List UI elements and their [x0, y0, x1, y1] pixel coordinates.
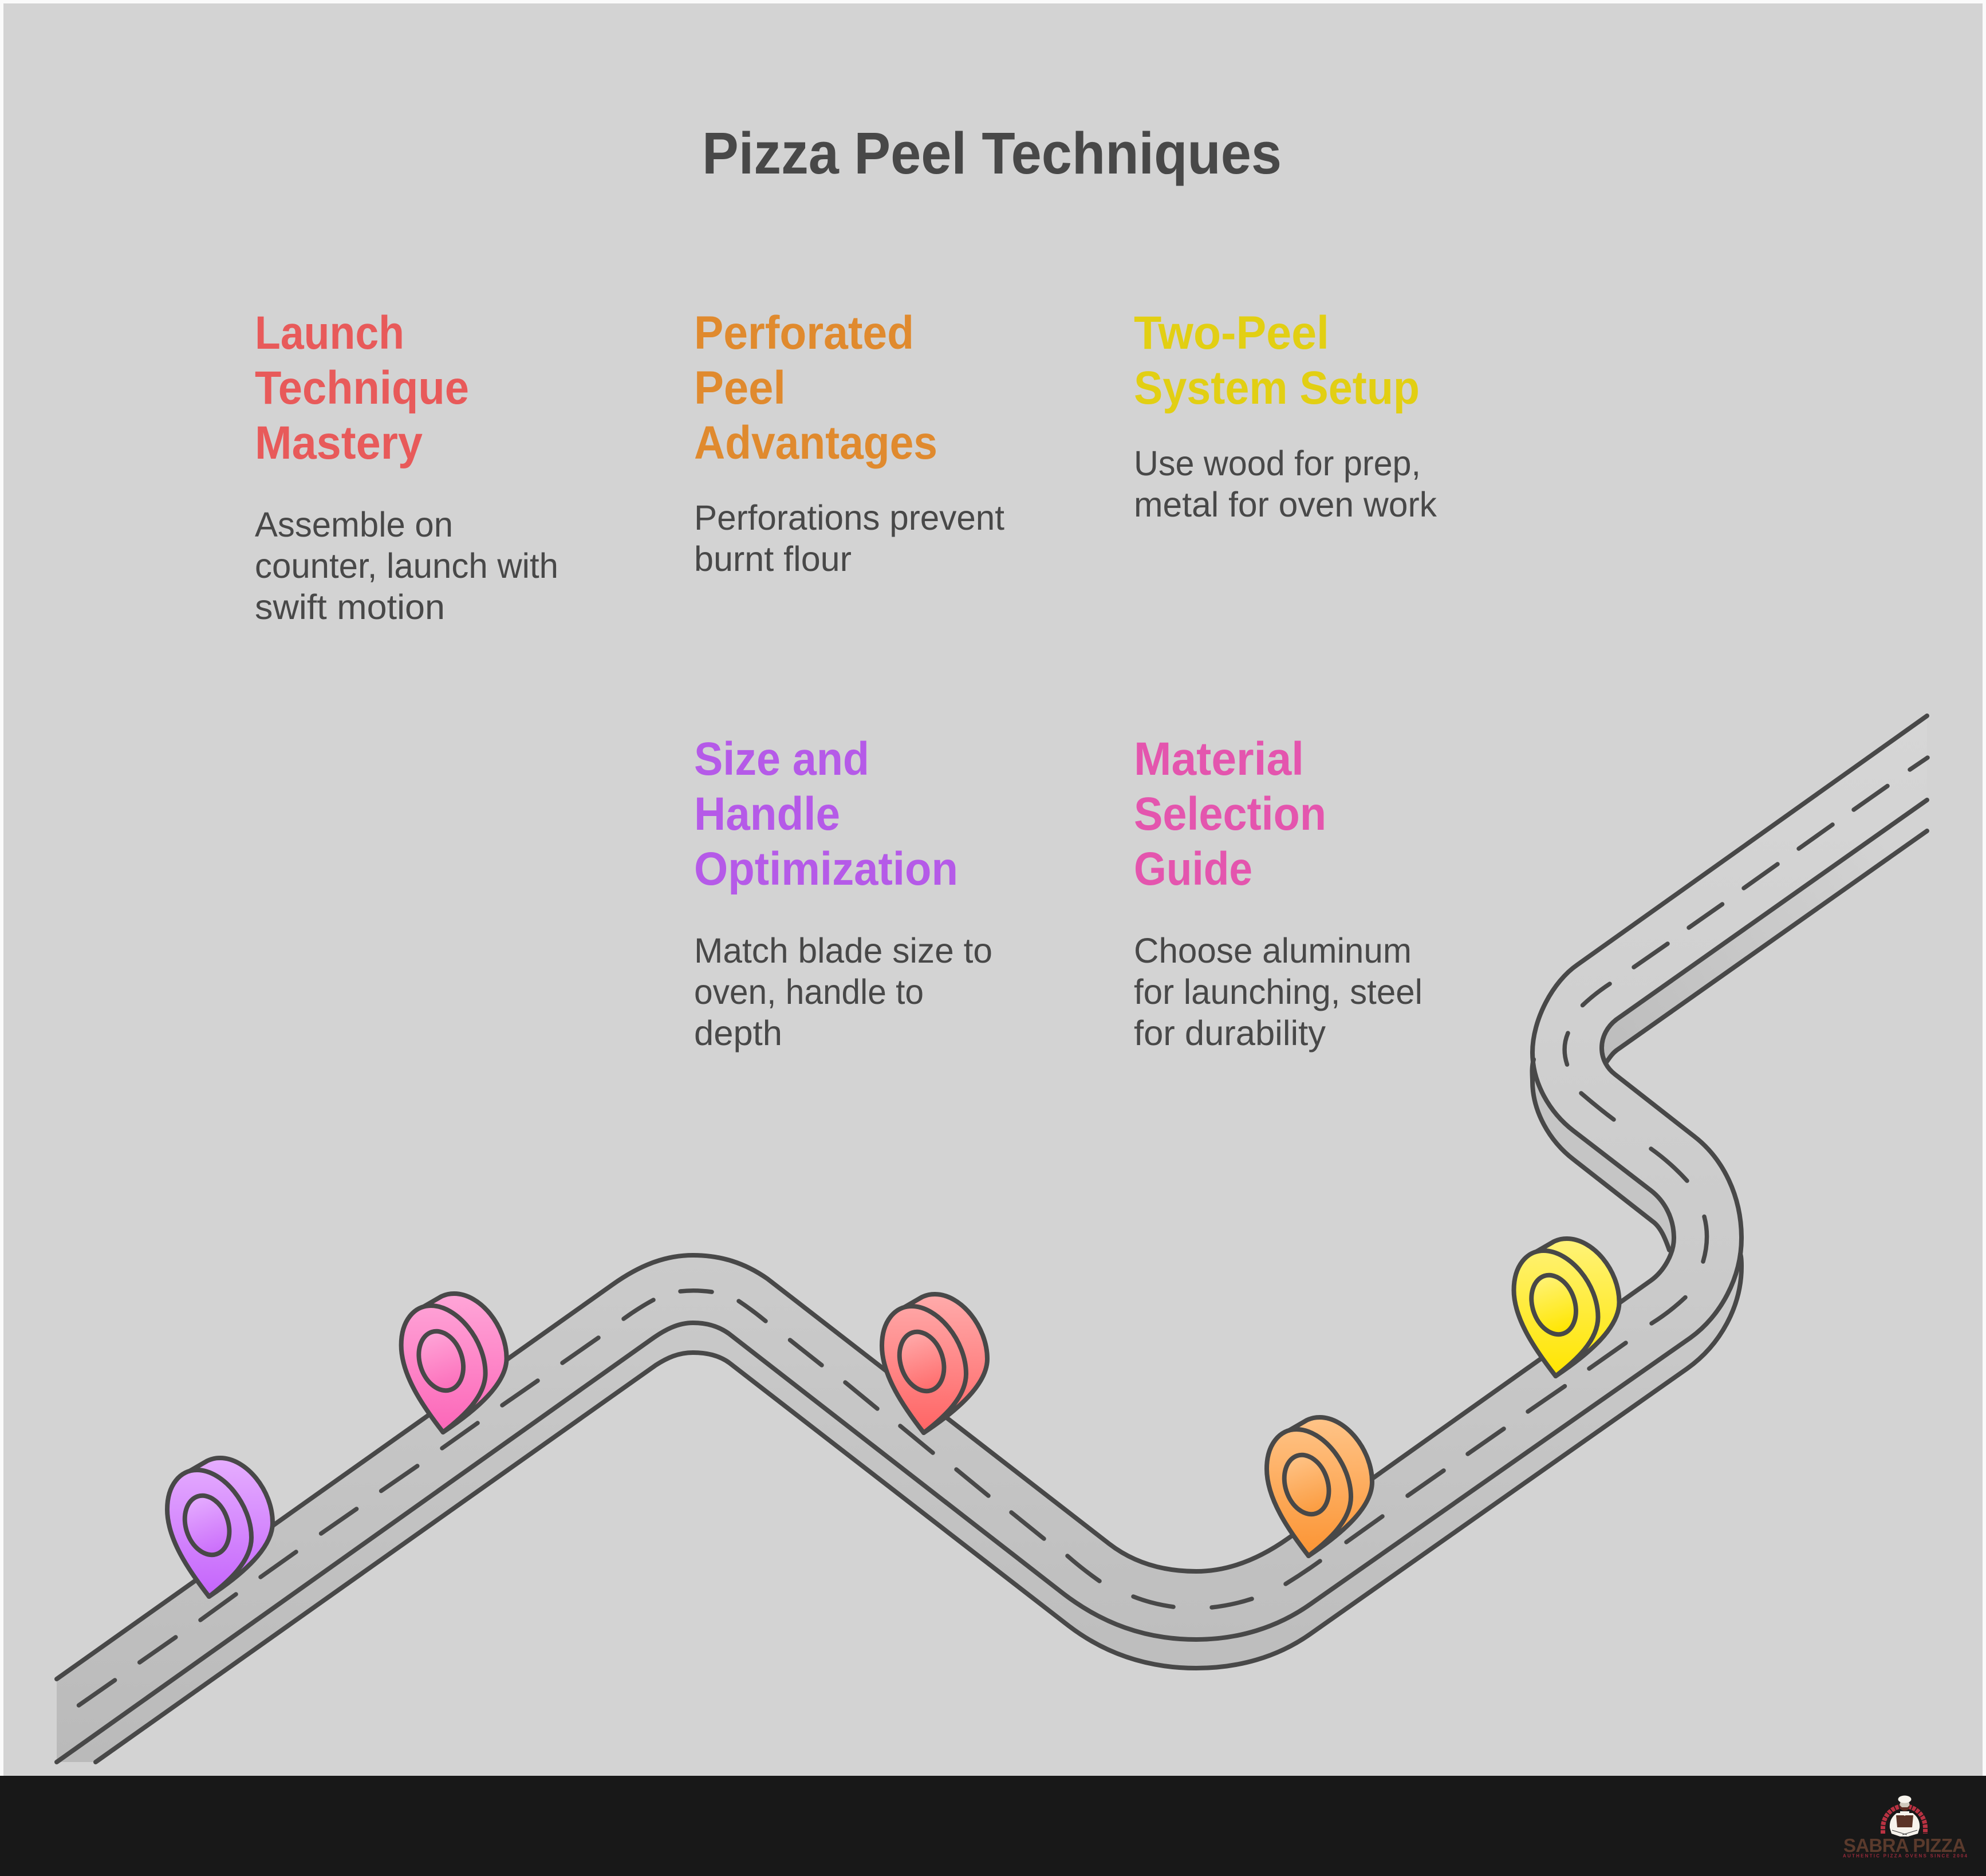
road lower edge line — [57, 800, 1927, 1762]
heading: Launch Technique Mastery — [255, 307, 469, 469]
description: Size and Handle Optimization: oven, handle to — [694, 972, 924, 1011]
description: Material Selection Guide — [1134, 931, 1422, 1053]
description: Material Selection Guide: for launching, steel — [1134, 972, 1422, 1011]
winding road — [57, 716, 1928, 1762]
logo wordmark: SABRA PIZZA — [1843, 1835, 1966, 1856]
description: Perforated Peel Advantages: burnt flour — [694, 539, 852, 578]
description: Size and Handle Optimization — [694, 931, 992, 1053]
logo icon: brick oven arch — [1883, 1806, 1925, 1834]
icon: yellow location pin — [1514, 1239, 1619, 1376]
description: Two-Peel System Setup — [1134, 444, 1437, 524]
logo: Sabra Pizza — [1843, 1796, 1968, 1859]
road centre dashes — [79, 758, 1928, 1705]
heading: Launch Technique Mastery: Launch — [255, 307, 404, 359]
description: Launch Technique Mastery: counter, launch with — [255, 546, 558, 585]
text block: Material Selection Guide — [1134, 733, 1422, 1053]
heading: Perforated Peel Advantages: Peel — [694, 362, 786, 414]
heading: Size and Handle Optimization: Optimization — [694, 843, 958, 895]
logo tagline: AUTHENTIC PIZZA OVENS SINCE 2004 — [1843, 1853, 1968, 1859]
heading: Two-Peel System Setup: System Setup — [1134, 362, 1420, 414]
heading: Launch Technique Mastery: Mastery — [255, 417, 423, 469]
icon: purple location pin — [167, 1458, 273, 1597]
heading: Two-Peel System Setup — [1134, 307, 1420, 414]
heading: Perforated Peel Advantages — [694, 307, 937, 469]
description: Material Selection Guide: Choose aluminum — [1134, 931, 1412, 970]
description: Size and Handle Optimization: depth — [694, 1014, 782, 1053]
description: Perforated Peel Advantages: Perforations prevent — [694, 498, 1004, 537]
footer band — [0, 1776, 1986, 1876]
road surface — [57, 716, 1927, 1762]
heading: Material Selection Guide: Material — [1134, 733, 1304, 785]
icon: orange location pin — [1267, 1417, 1372, 1556]
text block: Size and Handle Optimization — [694, 733, 992, 1053]
heading: Size and Handle Optimization: Size and — [694, 733, 869, 785]
road side wall: lower — [57, 1238, 1741, 1762]
road side edge line: upper right — [1606, 831, 1927, 1062]
heading: Material Selection Guide: Selection — [1134, 788, 1326, 840]
title: Pizza Peel Techniques — [702, 120, 1282, 186]
icon: red location pin — [882, 1294, 987, 1433]
description: Launch Technique Mastery — [255, 505, 558, 626]
description: Perforated Peel Advantages — [694, 498, 1004, 578]
description: Two-Peel System Setup: Use wood for prep, — [1134, 444, 1421, 483]
heading: Material Selection Guide: Guide — [1134, 843, 1252, 895]
heading: Two-Peel System Setup: Two-Peel — [1134, 307, 1329, 359]
description: Size and Handle Optimization: Match blade size to — [694, 931, 992, 970]
road side wall: upper right — [1602, 800, 1927, 1062]
text block: Two-Peel System Setup — [1134, 307, 1437, 524]
description: Launch Technique Mastery: Assemble on — [255, 505, 453, 544]
text block: Launch Technique Mastery — [255, 307, 558, 626]
heading: Material Selection Guide — [1134, 733, 1326, 895]
icon: pink location pin — [401, 1294, 507, 1432]
heading: Size and Handle Optimization: Handle — [694, 788, 840, 840]
heading: Perforated Peel Advantages: Advantages — [694, 417, 937, 469]
heading: Launch Technique Mastery: Technique — [255, 362, 469, 414]
heading: Perforated Peel Advantages: Perforated — [694, 307, 914, 359]
road side wall: left bend — [1532, 1053, 1674, 1250]
heading: Size and Handle Optimization — [694, 733, 958, 895]
road side bottom edge line — [96, 1254, 1741, 1762]
description: Material Selection Guide: for durability — [1134, 1014, 1326, 1053]
road side edge line: left bend — [1532, 1059, 1669, 1250]
description: Two-Peel System Setup: metal for oven work — [1134, 485, 1437, 524]
text block: Perforated Peel Advantages — [694, 307, 1004, 578]
description: Launch Technique Mastery: swift motion — [255, 588, 445, 626]
logo icon: chef figure — [1890, 1796, 1920, 1836]
road upper edge line — [57, 716, 1927, 1679]
